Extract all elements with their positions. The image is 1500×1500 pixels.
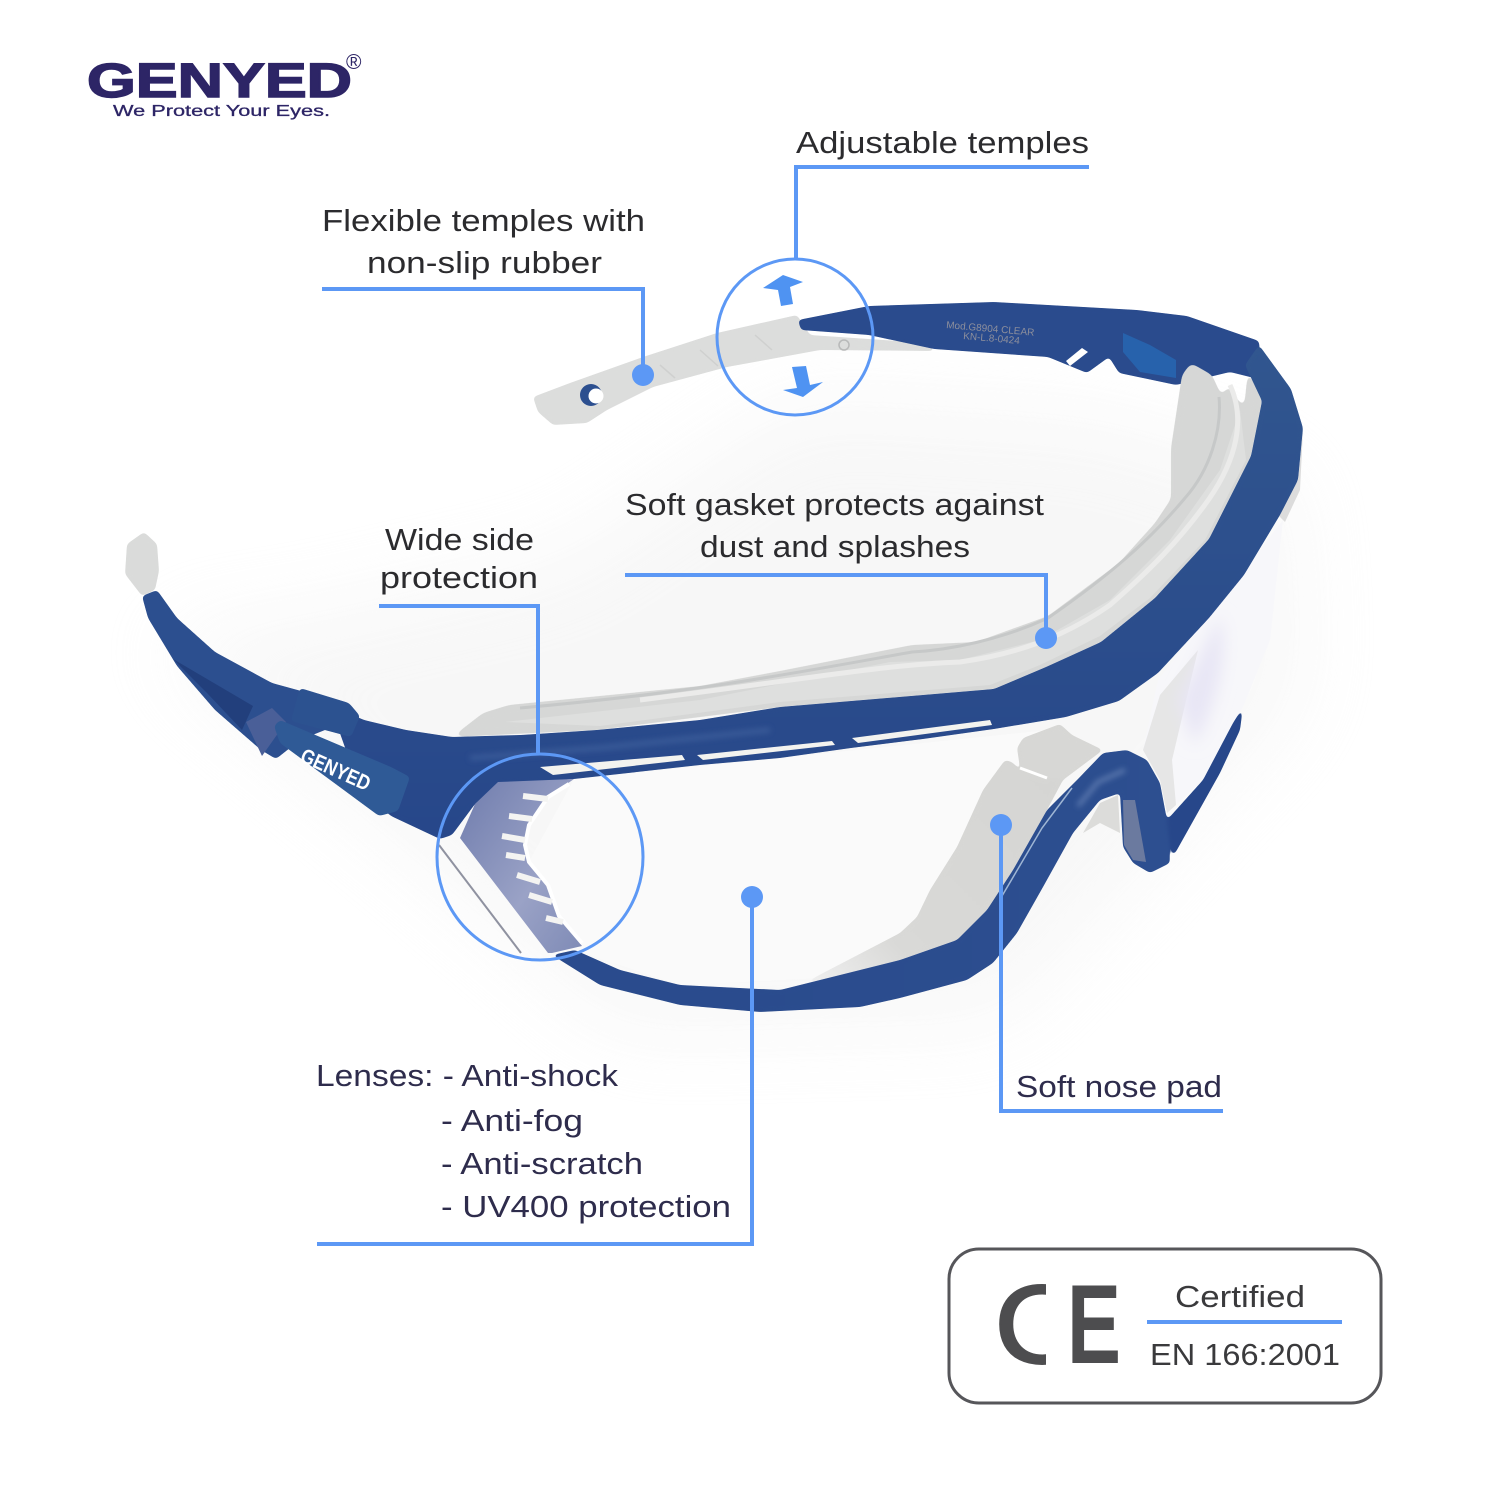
background shadow xyxy=(150,400,1300,1030)
certification badge xyxy=(949,1249,1381,1403)
hinge tab with brand xyxy=(274,720,410,816)
callout: lenses: - UV400 protection xyxy=(441,1189,731,1224)
callout: adjustable temples xyxy=(717,125,1089,415)
frame top band xyxy=(330,345,1303,839)
callout: wide side protection xyxy=(379,522,643,960)
logo: GENYED xyxy=(87,55,352,108)
CE mark: C xyxy=(994,1263,1084,1387)
safety glasses illustration xyxy=(125,302,1303,1012)
callout: lenses: Lenses: - Anti-shock xyxy=(316,1058,619,1093)
callout: flexible temples xyxy=(322,203,654,386)
callout: lenses xyxy=(316,886,763,1244)
callout: flexible temples: non-slip rubber xyxy=(367,245,602,280)
callout: soft gasket: Soft gasket protects against xyxy=(625,487,1044,522)
callout: lenses: - Anti-scratch xyxy=(441,1146,643,1181)
callout: wide side protection: protection xyxy=(380,560,538,595)
near temple arm xyxy=(142,590,360,759)
CE mark: E xyxy=(1067,1262,1121,1387)
icon: up arrow xyxy=(763,275,803,306)
soft gasket xyxy=(452,363,1262,737)
far temple blue arm: KN-L.8-0424 xyxy=(963,331,1021,347)
far temple blue arm: Mod.G8904 CLEAR xyxy=(946,320,1035,339)
callout: lenses: - Anti-fog xyxy=(441,1103,583,1138)
near temple rubber tip xyxy=(125,532,159,596)
side shield xyxy=(439,779,582,953)
frame lower rim and nose bridge xyxy=(552,707,1243,1012)
certification badge: Certified xyxy=(1175,1279,1305,1314)
band highlight xyxy=(470,730,770,758)
vent slots xyxy=(540,720,992,775)
CE mark xyxy=(999,1284,1118,1365)
callout: soft gasket: dust and splashes xyxy=(700,529,970,564)
logo: We Protect Your Eyes. xyxy=(113,103,330,120)
certification badge: EN 166:2001 xyxy=(1150,1337,1340,1372)
main lens xyxy=(530,730,1050,985)
far temple rubber tip xyxy=(533,315,936,425)
far temple blue arm xyxy=(798,302,1262,385)
right lens side xyxy=(1143,430,1303,813)
callout: soft gasket xyxy=(625,487,1057,649)
callout: soft nose pad xyxy=(990,814,1223,1111)
callout: flexible temples: Flexible temples with xyxy=(322,203,645,238)
nose pad xyxy=(800,724,1120,985)
icon: down arrow xyxy=(783,366,823,397)
callout: adjustable temples: Adjustable temples xyxy=(796,125,1089,160)
callout: soft nose pad: Soft nose pad xyxy=(1016,1069,1222,1104)
callout: wide side protection: Wide side xyxy=(385,522,534,557)
upper hinge tab xyxy=(291,688,360,737)
logo xyxy=(87,51,362,120)
logo: ® xyxy=(346,51,362,74)
hinge tab with brand: GENYED xyxy=(297,745,374,796)
